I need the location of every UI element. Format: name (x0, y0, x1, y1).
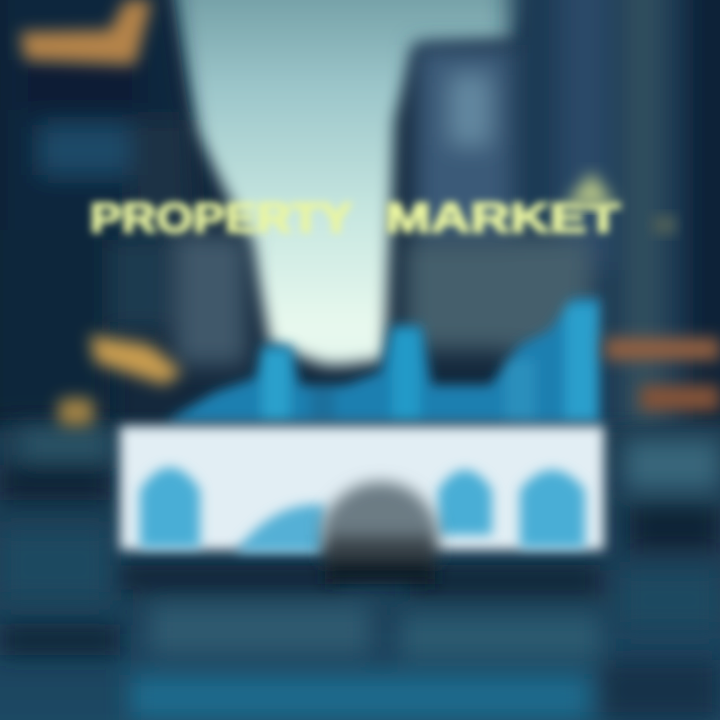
heading word two: MARKET (385, 194, 620, 241)
heading (90, 194, 620, 241)
street texture (0, 430, 720, 720)
street (0, 425, 720, 720)
panel chart: blue arches (140, 468, 585, 552)
blue bar chart skyline (165, 298, 600, 422)
car (322, 482, 438, 584)
small marker right of heading (652, 215, 676, 235)
heading word one: PROPERTY (90, 194, 352, 241)
icon: yellow house peak (565, 172, 615, 205)
white data panel (120, 426, 604, 552)
orange right label (605, 338, 720, 411)
sky (165, 0, 540, 365)
orange left label (58, 335, 182, 426)
left buildings (0, 0, 247, 470)
right buildings (405, 0, 720, 450)
icon: orange roof graphic top left (20, 0, 152, 65)
